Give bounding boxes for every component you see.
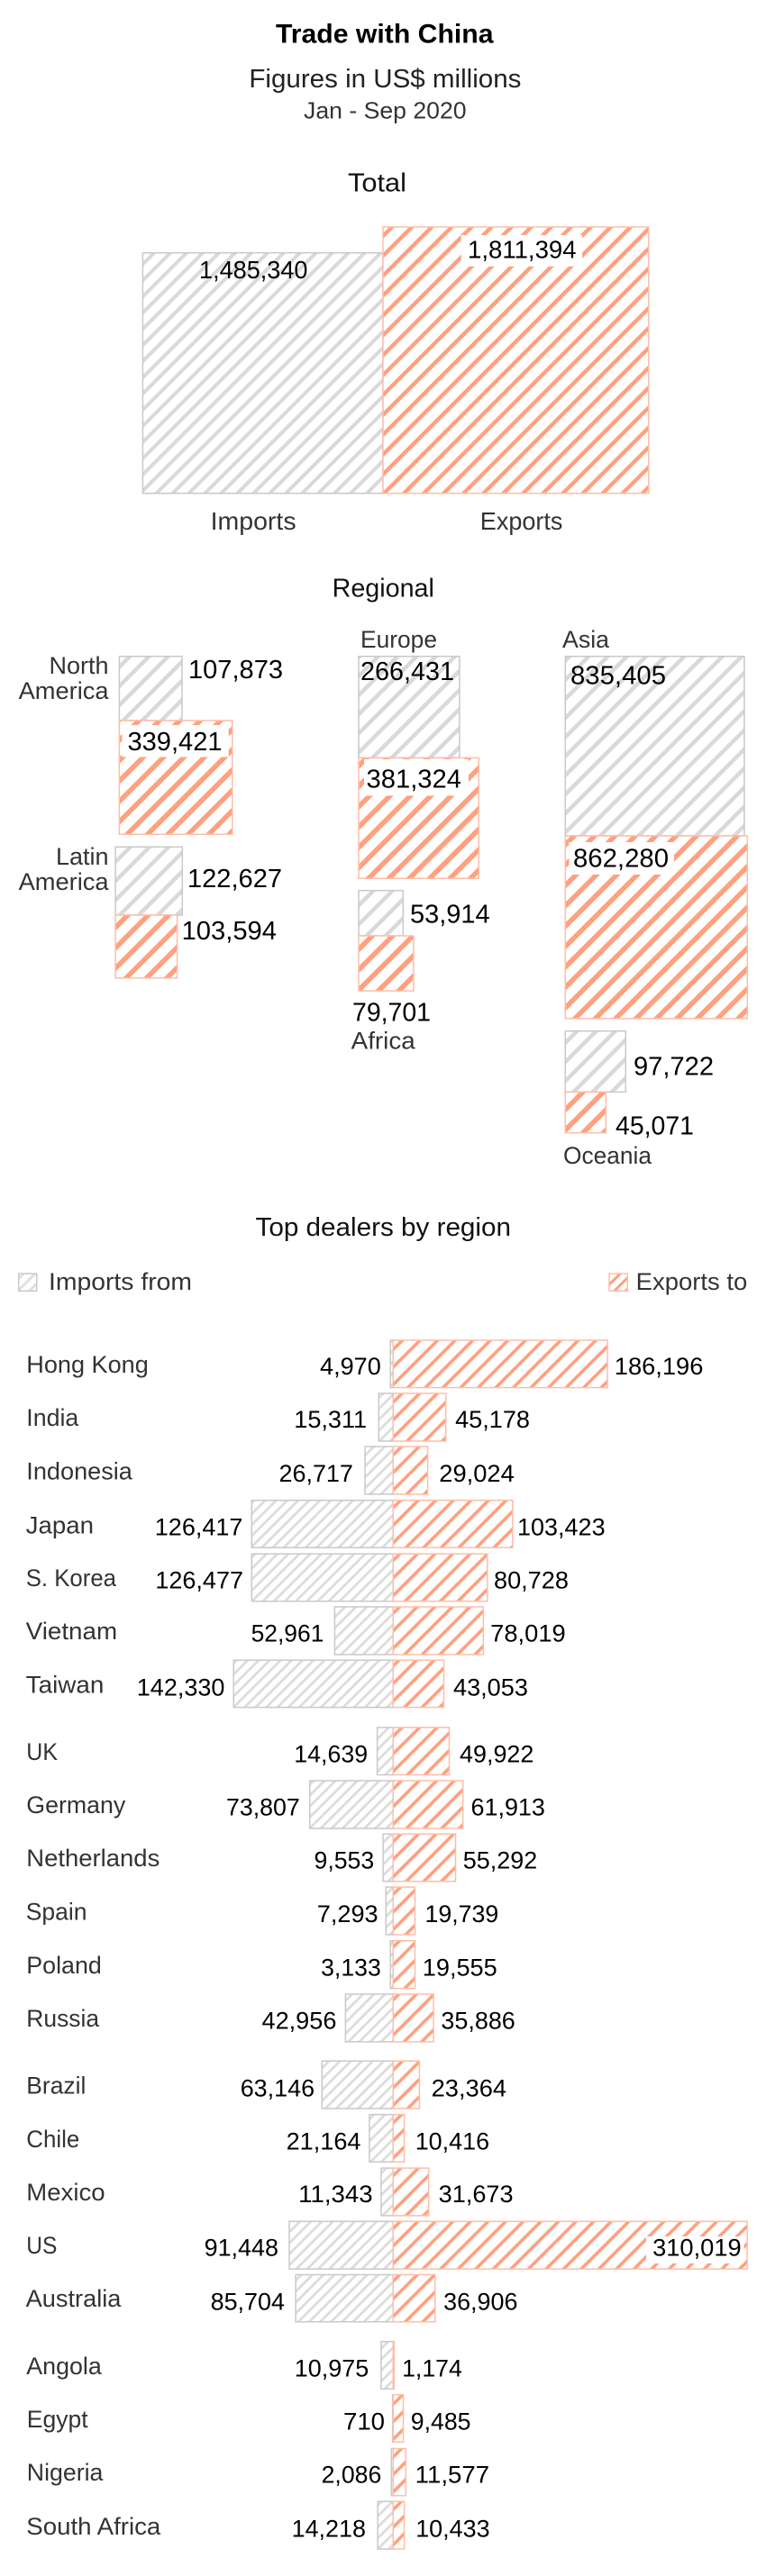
row: South Africa: South Africa — [26, 2513, 161, 2540]
row: Australia: Australia — [26, 2285, 122, 2312]
title: Trade with China — [276, 19, 494, 49]
subtitle: units: Figures in US$ millions — [249, 65, 521, 94]
group: Americas and Oceania — [26, 2061, 747, 2322]
total exports value: 1,811,394 — [468, 236, 577, 264]
row: Spain — [26, 1887, 498, 1935]
panel: North America: America — [19, 677, 110, 704]
row: UK: UK — [26, 1738, 58, 1765]
row: Angola — [26, 2342, 462, 2389]
row: US: 91,448 — [205, 2234, 278, 2261]
row: Egypt: Egypt — [27, 2406, 88, 2433]
panel: Oceania: 97,722 — [634, 1053, 714, 1082]
row: Chile: 21,164 — [287, 2127, 360, 2154]
row: South Africa: 14,218 — [292, 2515, 366, 2542]
row: S. Korea — [26, 1554, 569, 1601]
panel: North America: North — [49, 652, 108, 679]
row: Poland: Poland — [26, 1952, 102, 1979]
panel: North America: 339,421 — [128, 728, 222, 757]
row: Chile: 10,416 — [415, 2127, 489, 2154]
label: Imports: Imports — [211, 507, 296, 535]
total exports box — [383, 227, 649, 494]
panel: Asia — [562, 626, 747, 1019]
row: Taiwan — [26, 1660, 528, 1708]
legend: imports: Imports from — [49, 1268, 192, 1295]
panel: Africa: 53,914 — [410, 901, 490, 930]
panel: Europe — [359, 626, 479, 878]
row: Hong Kong: 4,970 — [320, 1353, 381, 1380]
row: Germany: 73,807 — [226, 1794, 300, 1821]
panel: Africa: Africa — [351, 1028, 416, 1055]
row: Angola: 10,975 — [295, 2355, 369, 2382]
row: Hong Kong: Hong Kong — [26, 1351, 149, 1378]
row: UK: 49,922 — [460, 1740, 533, 1767]
row: Brazil — [26, 2061, 506, 2109]
panel: Latin America — [19, 843, 282, 978]
row: Vietnam: 52,961 — [251, 1620, 324, 1647]
row: Poland — [26, 1941, 497, 1989]
row: India: 45,178 — [455, 1406, 530, 1433]
panel: Africa: 79,701 — [352, 998, 431, 1027]
row: US — [26, 2221, 747, 2269]
row: Japan: 126,417 — [155, 1513, 242, 1540]
row: Egypt: 9,485 — [411, 2408, 470, 2435]
row: Mexico: 11,343 — [298, 2181, 373, 2208]
row: Nigeria: 11,577 — [415, 2462, 489, 2489]
row: Mexico: Mexico — [26, 2179, 105, 2206]
row: Spain: 7,293 — [317, 1900, 378, 1927]
row: Australia: 36,906 — [443, 2289, 517, 2316]
row: Indonesia: 26,717 — [279, 1460, 353, 1487]
row: Taiwan: Taiwan — [26, 1671, 104, 1698]
row: Russia — [26, 1994, 515, 2042]
row: Nigeria — [27, 2448, 489, 2496]
group: Asia — [26, 1340, 703, 1708]
row: South Africa: 10,433 — [415, 2515, 490, 2542]
row: Vietnam: 78,019 — [490, 1620, 566, 1647]
panel: Europe: 266,431 — [360, 658, 454, 686]
row: Russia: 35,886 — [441, 2008, 515, 2035]
heading: Top dealers by region: Top dealers by region — [256, 1213, 511, 1242]
row: Australia — [26, 2275, 517, 2322]
row: Angola: Angola — [26, 2353, 103, 2380]
panel: Oceania: Oceania — [563, 1142, 652, 1169]
panel: total chart — [142, 227, 649, 535]
panel: Latin America: Latin — [56, 843, 108, 870]
row: Vietnam: Vietnam — [26, 1618, 117, 1645]
panel: Europe: 381,324 — [366, 766, 461, 794]
row: Hong Kong: 186,196 — [615, 1353, 703, 1380]
row: Chile — [26, 2115, 489, 2162]
row: Russia: Russia — [26, 2005, 100, 2032]
row: Spain: 19,739 — [425, 1900, 498, 1927]
row: Indonesia: 29,024 — [439, 1460, 515, 1487]
row: Poland: 19,555 — [423, 1954, 497, 1981]
panel: Asia: 862,280 — [573, 844, 669, 873]
row: India: India — [26, 1404, 79, 1431]
row: Germany: Germany — [26, 1791, 126, 1819]
label: Exports: Exports — [480, 507, 562, 535]
row: Hong Kong — [26, 1340, 703, 1388]
row: Spain: Spain — [26, 1899, 87, 1926]
row: S. Korea: S. Korea — [26, 1565, 117, 1592]
heading: Regional: Regional — [333, 574, 434, 603]
row: South Africa — [26, 2501, 490, 2549]
panel: Latin America: 122,627 — [187, 865, 282, 893]
panel: Oceania: 45,071 — [616, 1111, 694, 1140]
row: India — [26, 1393, 530, 1441]
panel: Asia: Asia — [562, 626, 610, 653]
row: S. Korea: 126,477 — [155, 1567, 243, 1594]
row: Netherlands: Netherlands — [26, 1845, 160, 1872]
row: Australia: 85,704 — [211, 2289, 285, 2316]
panel: Asia: 835,405 — [570, 662, 666, 691]
row: UK: 14,639 — [294, 1740, 368, 1767]
panel: Oceania — [563, 1031, 714, 1169]
panel: North America: 107,873 — [188, 656, 283, 685]
row: Brazil: 23,364 — [432, 2074, 506, 2101]
row: Nigeria: Nigeria — [27, 2459, 104, 2486]
row: UK — [26, 1728, 533, 1774]
bar chart: top dealers — [26, 1340, 747, 2549]
row: Indonesia: Indonesia — [26, 1457, 133, 1484]
row: US: 310,019 — [652, 2234, 742, 2261]
row: Japan — [26, 1501, 606, 1547]
row: Poland: 3,133 — [321, 1954, 381, 1981]
row: Mexico — [26, 2168, 514, 2216]
row: Egypt: 710 — [343, 2408, 385, 2435]
row: Indonesia — [26, 1447, 515, 1494]
row: Taiwan: 43,053 — [453, 1673, 528, 1701]
group: Europe — [26, 1728, 545, 2042]
group: Africa — [26, 2342, 490, 2549]
panel: Latin America: 103,594 — [182, 917, 277, 946]
panel: North America — [19, 652, 283, 834]
row: Brazil: Brazil — [26, 2072, 86, 2099]
row: Egypt — [27, 2395, 471, 2442]
panel: Latin America: America — [19, 868, 110, 895]
row: Netherlands: 9,553 — [314, 1847, 374, 1874]
row: Brazil: 63,146 — [241, 2074, 315, 2101]
row: Vietnam — [26, 1607, 566, 1655]
legend: exports: Exports to — [636, 1268, 747, 1295]
row: Mexico: 31,673 — [439, 2181, 514, 2208]
row: Germany: 61,913 — [470, 1794, 545, 1821]
total imports box — [142, 253, 383, 494]
row: Nigeria: 2,086 — [322, 2462, 381, 2489]
row: Chile: Chile — [26, 2126, 79, 2153]
panel: Africa — [351, 891, 490, 1055]
row: Japan: 103,423 — [517, 1513, 606, 1540]
row: Germany — [26, 1781, 545, 1828]
row: S. Korea: 80,728 — [494, 1567, 569, 1594]
panel: Europe: Europe — [360, 626, 437, 653]
heading: Total: Total — [348, 168, 406, 197]
row: Russia: 42,956 — [261, 2008, 336, 2035]
row: Taiwan: 142,330 — [137, 1673, 224, 1701]
total imports value: 1,485,340 — [199, 256, 308, 284]
row: Japan: Japan — [26, 1511, 94, 1538]
row: India: 15,311 — [294, 1406, 367, 1433]
row: Angola: 1,174 — [402, 2355, 462, 2382]
row: Netherlands: 55,292 — [463, 1847, 537, 1874]
row: Netherlands — [26, 1834, 537, 1882]
row: US: US — [26, 2232, 57, 2259]
subtitle: period: Jan - Sep 2020 — [304, 96, 467, 123]
